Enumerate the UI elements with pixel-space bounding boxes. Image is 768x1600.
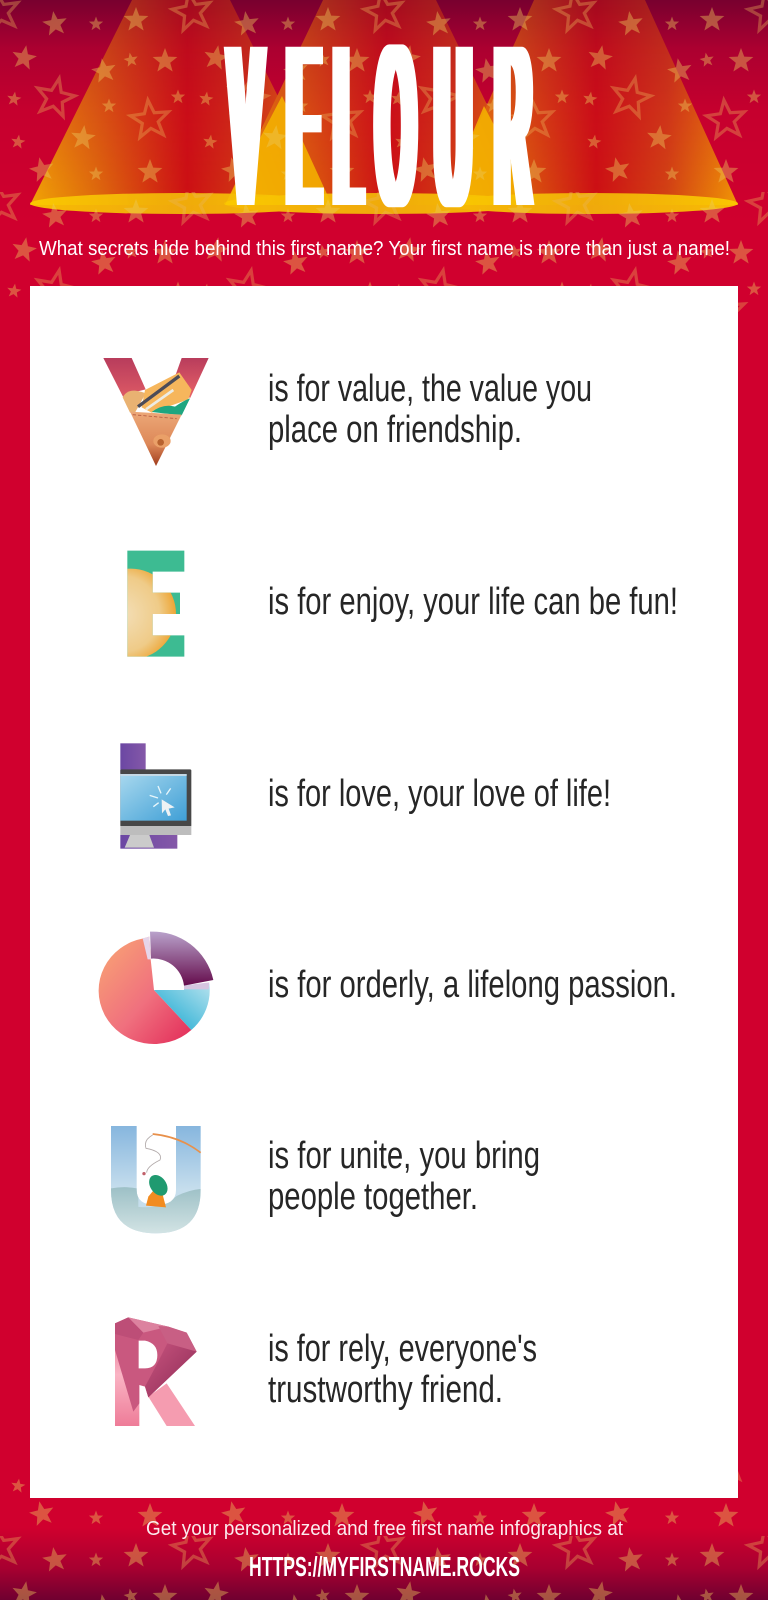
text: R line: is for rely, everyone's [268,1328,537,1370]
text: V line: is for value, the value you [268,368,592,410]
footer text: Get your personalized and free first name infographics at [146,1518,623,1540]
icon: letter E moon [127,550,184,657]
text: R line: trustworthy friend. [268,1369,503,1411]
star pattern: header [0,0,768,312]
text: V line [268,368,592,451]
spotlight pools [30,193,738,214]
panel: letters [30,286,738,1498]
icon: letter O pie chart [99,932,213,1044]
title: VELOUR [230,0,530,255]
text: U line [268,1135,540,1218]
icon: letter L monitor [120,743,191,849]
spotlight cones [30,0,738,205]
spotlight overlaps [225,96,536,205]
icon: letter R gem [115,1317,197,1426]
footer url: HTTPS://MYFIRSTNAME.ROCKS [249,1551,520,1582]
text: V line: place on friendship. [268,409,522,451]
subtitle: What secrets hide behind this first name? Your first name is more than just a name! [39,238,730,260]
text: U line: people together. [268,1176,478,1218]
text: R line [268,1328,537,1411]
icon: letter V wallet [103,358,209,466]
text: U line: is for unite, you bring [268,1135,540,1177]
text: L line: is for love, your love of life! [268,773,611,815]
icon: letter U fishing [111,1126,202,1234]
star pattern: footer [0,1468,768,1600]
